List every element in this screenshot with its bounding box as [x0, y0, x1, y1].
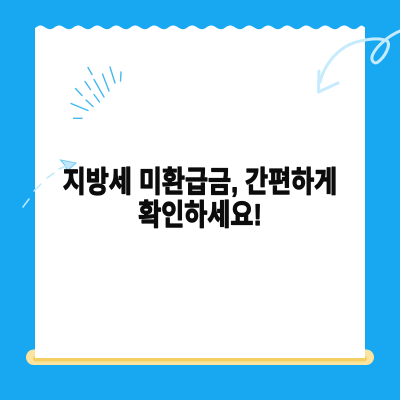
title: 확인하세요!	[138, 198, 262, 231]
panel: white card with scalloped top edge	[35, 26, 365, 358]
bottom bar: yellow binder edge	[26, 350, 374, 365]
arrow: pale looping arrow at upper right	[318, 31, 400, 92]
title	[63, 165, 337, 231]
icon: paper plane with dashed trail	[23, 160, 76, 207]
icon: radiating burst lines	[71, 67, 121, 118]
title: 지방세 미환급금, 간편하게	[63, 165, 337, 198]
